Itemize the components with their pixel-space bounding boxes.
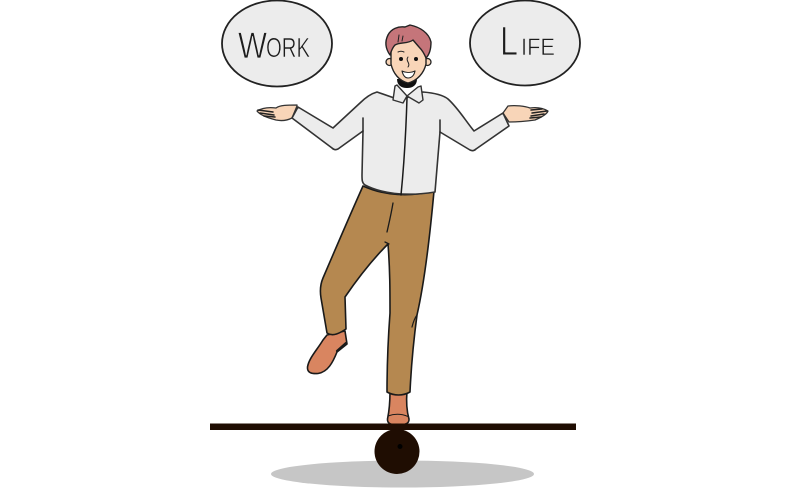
eyes, nose and mouth xyxy=(398,35,418,78)
left hand xyxy=(257,105,297,121)
hair xyxy=(386,25,431,58)
neck xyxy=(397,79,417,88)
ground shadow xyxy=(271,460,534,488)
raised shoe xyxy=(307,331,347,374)
collar xyxy=(393,85,423,103)
shirt xyxy=(292,92,509,195)
label: life: L xyxy=(500,18,518,64)
right hand xyxy=(503,106,548,122)
ears xyxy=(386,58,431,66)
label: work remainder: ORK xyxy=(266,32,310,63)
label: life remainder: IFE xyxy=(521,34,555,61)
ball xyxy=(374,429,420,474)
face xyxy=(391,36,426,83)
beam xyxy=(210,424,576,430)
trousers xyxy=(320,186,434,395)
bubble: life xyxy=(470,0,580,86)
label: work: W xyxy=(238,25,267,66)
standing foot xyxy=(387,391,409,425)
bubble: work xyxy=(222,0,332,86)
